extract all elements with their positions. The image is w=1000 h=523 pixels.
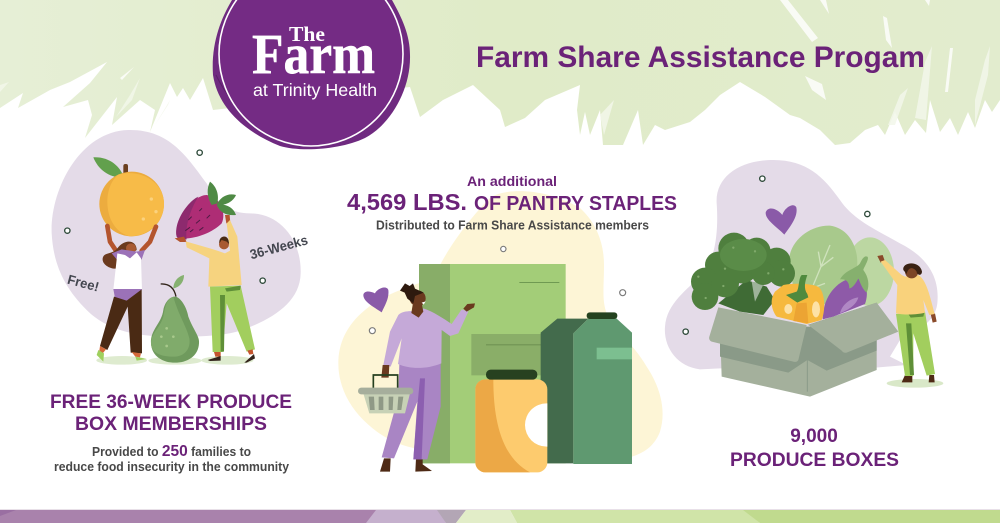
heading: free 36-week produce: FREE 36-WEEK PRODUCE bbox=[50, 392, 292, 413]
ground shadows bbox=[96, 356, 253, 365]
green cereal box bbox=[419, 264, 566, 463]
small ring markers bbox=[65, 150, 265, 283]
panel: produce box illustration bbox=[665, 160, 943, 397]
man holding strawberry bbox=[175, 215, 255, 363]
heading: box memberships: BOX MEMBERSHIPS bbox=[75, 414, 267, 435]
icon: broccoli bbox=[691, 233, 795, 315]
lavender blob bbox=[52, 130, 301, 337]
footer color band bbox=[0, 509, 1000, 523]
green cartons bbox=[541, 312, 632, 464]
icon: yellow pepper bbox=[772, 275, 824, 324]
logo word: The: The bbox=[289, 22, 325, 46]
icon: purple heart bbox=[363, 288, 388, 312]
label: Free!: Free! bbox=[66, 272, 101, 295]
line: distributed: Distributed to Farm Share Assistance members bbox=[376, 218, 649, 232]
label: 36-Weeks: 36-Weeks bbox=[248, 232, 310, 262]
leafy greens bbox=[789, 226, 894, 310]
basket bbox=[358, 375, 413, 413]
text block: free memberships bbox=[50, 392, 292, 474]
icon: eggplant bbox=[823, 256, 868, 319]
icon: purple heart bbox=[766, 205, 797, 235]
small ring markers bbox=[683, 176, 870, 334]
lavender blob bbox=[665, 160, 938, 373]
description line with 250: Provided to 250 families to bbox=[92, 443, 251, 460]
logo: The Farm at Trinity Health bbox=[213, 0, 410, 149]
woman reaching bbox=[877, 255, 943, 388]
line: an additional: An additional bbox=[467, 173, 557, 189]
pale yellow blob bbox=[338, 191, 663, 463]
heading: produce boxes: PRODUCE BOXES bbox=[730, 450, 899, 471]
woman with basket bbox=[358, 283, 475, 472]
background: green paint brush band bbox=[0, 0, 1000, 145]
logo word: at Trinity Health: at Trinity Health bbox=[253, 80, 377, 100]
small ring markers bbox=[369, 246, 626, 334]
icon: orange bbox=[93, 157, 164, 236]
description line two: reduce food insecurity in the community bbox=[54, 460, 289, 474]
cardboard box bbox=[709, 303, 898, 397]
text block: pantry staples bbox=[347, 173, 677, 232]
icon: pear bbox=[151, 275, 199, 363]
panel: pantry staples illustration bbox=[338, 191, 663, 472]
text block: produce boxes bbox=[730, 426, 899, 471]
logo word: Farm: Farm bbox=[252, 23, 375, 86]
woman holding orange bbox=[97, 226, 156, 362]
heading: of pantry staples: OF PANTRY STAPLES bbox=[474, 193, 677, 215]
panel: free memberships illustration bbox=[52, 130, 310, 365]
icon: strawberry bbox=[176, 182, 236, 240]
number: 9,000: 9,000 bbox=[790, 426, 838, 447]
heading: 4,569 lbs: 4,569 LBS. bbox=[347, 189, 467, 215]
jar bbox=[475, 370, 548, 472]
title: Farm Share Assistance Progam bbox=[476, 41, 925, 74]
